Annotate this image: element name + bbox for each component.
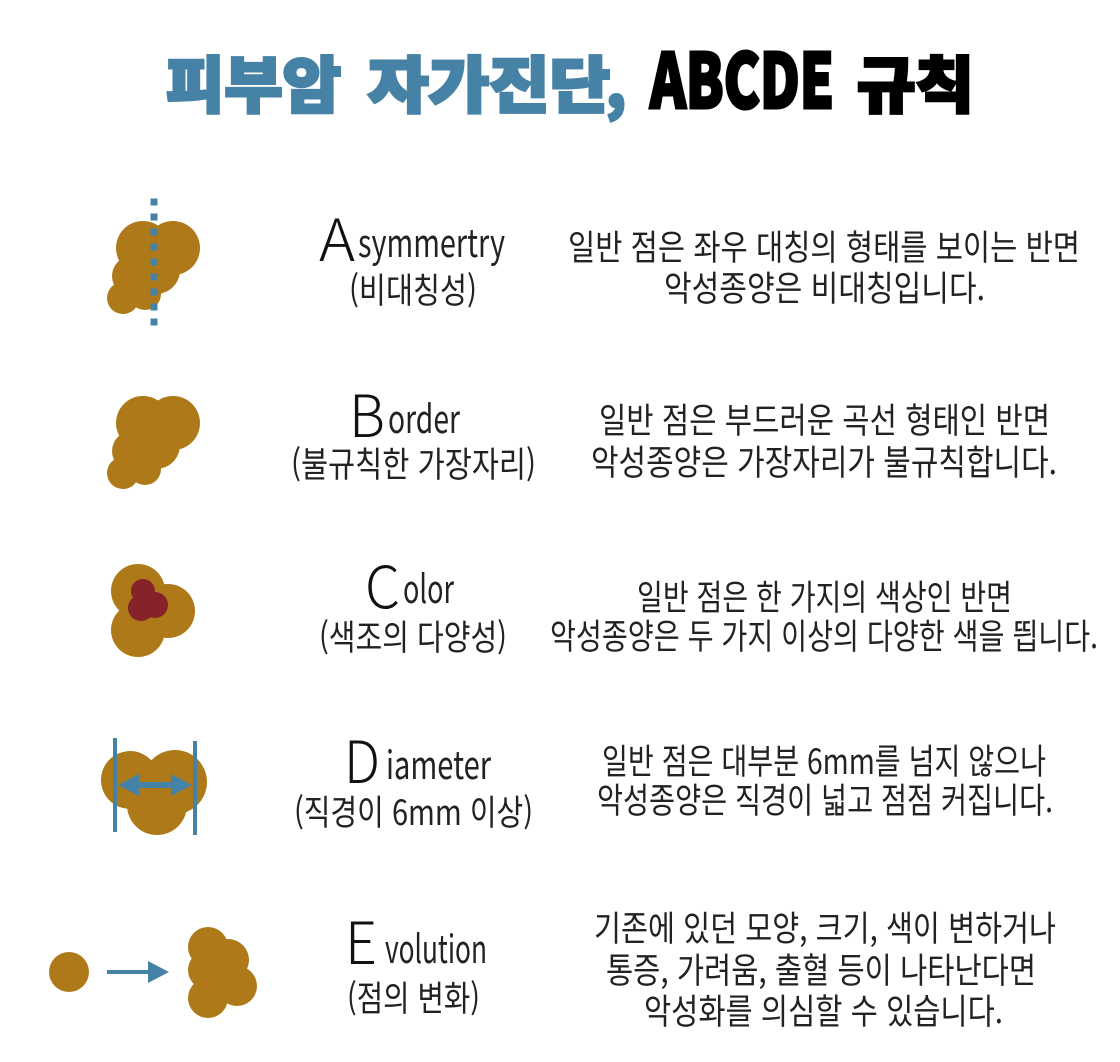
label: Border: B <box>349 370 385 454</box>
label: Color: (색조의 다양성) <box>319 610 507 661</box>
label: Color <box>319 541 507 661</box>
title: 피부암 <box>166 36 341 125</box>
description: Border <box>591 393 1057 486</box>
description: Color <box>550 570 1098 660</box>
icon: two-color mole <box>111 564 195 657</box>
row: Border <box>107 370 1057 489</box>
description: Border: 일반 점은 부드러운 곡선 형태인 반면 <box>599 393 1050 444</box>
title: , <box>606 35 626 124</box>
label: Asymmetry: symmertry <box>358 213 505 269</box>
label: Border: (불규칙한 가장자리) <box>291 437 536 488</box>
label: Color: olor <box>403 559 455 615</box>
title: 규칙 <box>857 36 974 125</box>
label: Diameter <box>294 716 533 836</box>
row: Asymmetry <box>107 194 1080 326</box>
description: Evolution: 통증, 가려움, 출혈 등이 나타난다면 <box>606 943 1036 994</box>
label: Diameter: (직경이 6mm 이상) <box>294 785 533 836</box>
description: Border: 악성종양은 가장자리가 불규칙합니다. <box>591 435 1057 486</box>
label: Asymmetry: (비대칭성) <box>349 263 477 314</box>
icon: irregular border mole <box>107 396 200 489</box>
label: Evolution: E <box>345 897 377 981</box>
icon: mole growing over time <box>49 927 257 1018</box>
label: Asymmetry: A <box>319 194 355 278</box>
label: Border <box>291 370 536 488</box>
description: Asymmetry: 악성종양은 비대칭입니다. <box>664 261 985 312</box>
title <box>166 21 974 130</box>
label: Diameter: iameter <box>386 735 492 791</box>
title: 자가진단 <box>368 36 610 125</box>
description: Color: 일반 점은 한 가지의 색상인 반면 <box>637 570 1012 621</box>
description: Diameter <box>597 734 1053 824</box>
icon: asymmetric mole with dotted axis <box>107 198 200 326</box>
row: Color <box>111 541 1098 661</box>
label: Asymmetry <box>319 194 505 314</box>
icon: mole with diameter arrow <box>101 738 207 835</box>
label: Color: C <box>365 541 400 625</box>
label: Border: order <box>388 389 461 445</box>
description: Evolution: 악성화를 의심할 수 있습니다. <box>644 984 1003 1035</box>
label: Evolution: (점의 변화) <box>347 971 480 1022</box>
row: Diameter <box>101 716 1053 836</box>
label: Diameter: D <box>344 716 380 800</box>
label: Evolution: volution <box>385 919 487 975</box>
title: ABCDE <box>649 21 834 130</box>
description: Evolution <box>594 901 1056 1035</box>
row: Evolution <box>49 897 1056 1035</box>
label: Evolution <box>345 897 487 1022</box>
description: Asymmetry <box>568 220 1080 312</box>
